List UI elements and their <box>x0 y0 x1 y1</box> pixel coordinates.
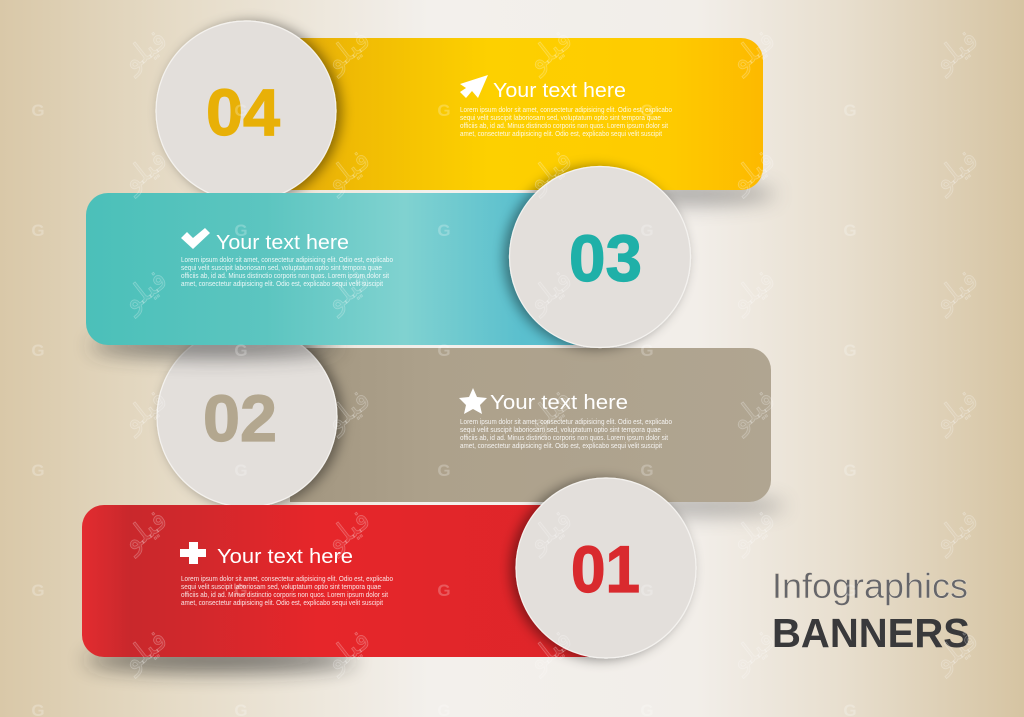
watermark pattern: فیلو <box>317 502 377 559</box>
watermark pattern: G <box>640 341 654 360</box>
watermark pattern: فیلو <box>519 382 579 439</box>
watermark pattern: G <box>31 581 45 600</box>
watermark pattern: فیلو <box>722 622 782 679</box>
heading 04: Your text here <box>493 80 626 102</box>
watermark pattern: G <box>437 341 451 360</box>
watermark pattern: فیلو <box>519 142 579 199</box>
watermark pattern: G <box>640 461 654 480</box>
icon: check mark <box>181 228 210 249</box>
watermark pattern: فیلو <box>519 622 579 679</box>
watermark pattern: فیلو <box>925 502 985 559</box>
icon: cross <box>180 542 206 564</box>
circle badge 03: 03 <box>569 221 642 295</box>
body text 02: Lorem ipsum dolor sit amet, consectetur adipisicing elit. Odio est, explicabo <box>460 419 672 426</box>
watermark pattern: G <box>31 101 45 120</box>
banner 01: red <box>82 505 606 672</box>
watermark pattern: G <box>640 581 654 600</box>
body text 03: officiis ab, id ad. Minus distinctio corporis non quos. Lorem ipsum dolor sit <box>181 273 389 280</box>
watermark pattern: G <box>437 221 451 240</box>
watermark pattern: G <box>234 101 248 120</box>
watermark pattern: فیلو <box>114 142 174 199</box>
body text 01: officiis ab, id ad. Minus distinctio corporis non quos. Lorem ipsum dolor sit <box>181 592 388 599</box>
heading 01: Your text here <box>217 546 353 568</box>
watermark pattern: فیلو <box>925 22 985 79</box>
body text 01 <box>181 576 393 607</box>
watermark pattern: G <box>437 101 451 120</box>
watermark pattern: فیلو <box>722 262 782 319</box>
body text 02: sequi velit suscipit laboriosam sed, voluptatum optio sint tempora quae <box>460 427 661 434</box>
body text 04: sequi velit suscipit laboriosam sed, voluptatum optio sint tempora quae <box>460 115 661 122</box>
body text 02 <box>460 419 672 450</box>
icon: paper plane <box>460 75 488 98</box>
watermark pattern: فیلو <box>519 502 579 559</box>
circle badge 02 <box>157 327 337 507</box>
watermark pattern: فیلو <box>519 22 579 79</box>
watermark pattern: فیلو <box>317 382 377 439</box>
body text 01: amet, consectetur adipisicing elit. Odio est, explicabo sequi velit suscipit <box>181 600 383 607</box>
watermark pattern: G <box>843 581 857 600</box>
watermark pattern: G <box>437 461 451 480</box>
title: BANNERS <box>772 610 970 656</box>
watermark pattern: فیلو <box>317 262 377 319</box>
watermark pattern: G <box>437 581 451 600</box>
watermark pattern: فیلو <box>925 622 985 679</box>
title <box>772 567 970 656</box>
watermark pattern: G <box>843 341 857 360</box>
circle badge 04: 04 <box>206 75 280 149</box>
circle badge 03 <box>510 166 690 348</box>
watermark pattern: G <box>31 461 45 480</box>
watermark pattern: فیلو <box>925 262 985 319</box>
watermark pattern: فیلو <box>317 22 377 79</box>
body text 03: amet, consectetur adipisicing elit. Odio est, explicabo sequi velit suscipit <box>181 281 383 288</box>
watermark pattern: G <box>234 581 248 600</box>
circle badge 02: 02 <box>203 381 277 455</box>
banner 04: yellow <box>290 38 775 204</box>
watermark pattern: فیلو <box>722 142 782 199</box>
icon: star <box>459 388 487 414</box>
watermark pattern: فیلو <box>722 22 782 79</box>
banner 03: teal <box>86 193 600 357</box>
body text 02: amet, consectetur adipisicing elit. Odio est, explicabo sequi velit suscipit <box>460 443 662 450</box>
watermark pattern: فیلو <box>317 622 377 679</box>
watermark pattern: فیلو <box>114 262 174 319</box>
watermark pattern: فیلو <box>519 262 579 319</box>
watermark pattern: G <box>843 461 857 480</box>
watermark pattern: G <box>31 341 45 360</box>
body text 01: Lorem ipsum dolor sit amet, consectetur adipisicing elit. Odio est, explicabo <box>181 576 393 583</box>
watermark pattern: فیلو <box>114 622 174 679</box>
watermark pattern: G <box>234 461 248 480</box>
body text 03: sequi velit suscipit laboriosam sed, voluptatum optio sint tempora quae <box>181 265 382 272</box>
body text 02: officiis ab, id ad. Minus distinctio corporis non quos. Lorem ipsum dolor sit <box>460 435 668 442</box>
body text 04: officiis ab, id ad. Minus distinctio corporis non quos. Lorem ipsum dolor sit <box>460 123 668 130</box>
heading 02: Your text here <box>490 392 628 414</box>
watermark pattern: G <box>640 101 654 120</box>
circle badge 04 <box>156 21 336 201</box>
banner 02: taupe <box>290 348 785 515</box>
circle badge 01: 01 <box>571 532 640 606</box>
watermark pattern: G <box>31 221 45 240</box>
circle badge 01 <box>516 478 696 658</box>
watermark pattern: فیلو <box>114 502 174 559</box>
watermark pattern: G <box>234 221 248 240</box>
watermark pattern: فیلو <box>925 142 985 199</box>
watermark pattern: G <box>843 221 857 240</box>
body text 04 <box>460 107 672 138</box>
body text 03 <box>181 257 393 288</box>
watermark pattern: G <box>234 341 248 360</box>
watermark pattern: فیلو <box>722 502 782 559</box>
watermark pattern: G <box>843 101 857 120</box>
body text 01: sequi velit suscipit laboriosam sed, voluptatum optio sint tempora quae <box>181 584 381 591</box>
body text 03: Lorem ipsum dolor sit amet, consectetur adipisicing elit. Odio est, explicabo <box>181 257 393 264</box>
watermark pattern: فیلو <box>722 382 782 439</box>
watermark pattern: فیلو <box>317 142 377 199</box>
body text 04: Lorem ipsum dolor sit amet, consectetur adipisicing elit. Odio est, explicabo <box>460 107 672 114</box>
title: Infographics <box>772 567 968 606</box>
watermark pattern: فیلو <box>925 382 985 439</box>
watermark pattern: فیلو <box>114 382 174 439</box>
watermark pattern: فیلو <box>114 22 174 79</box>
watermark pattern: G <box>640 221 654 240</box>
body text 04: amet, consectetur adipisicing elit. Odio est, explicabo sequi velit suscipit <box>460 131 662 138</box>
heading 03: Your text here <box>216 232 349 254</box>
